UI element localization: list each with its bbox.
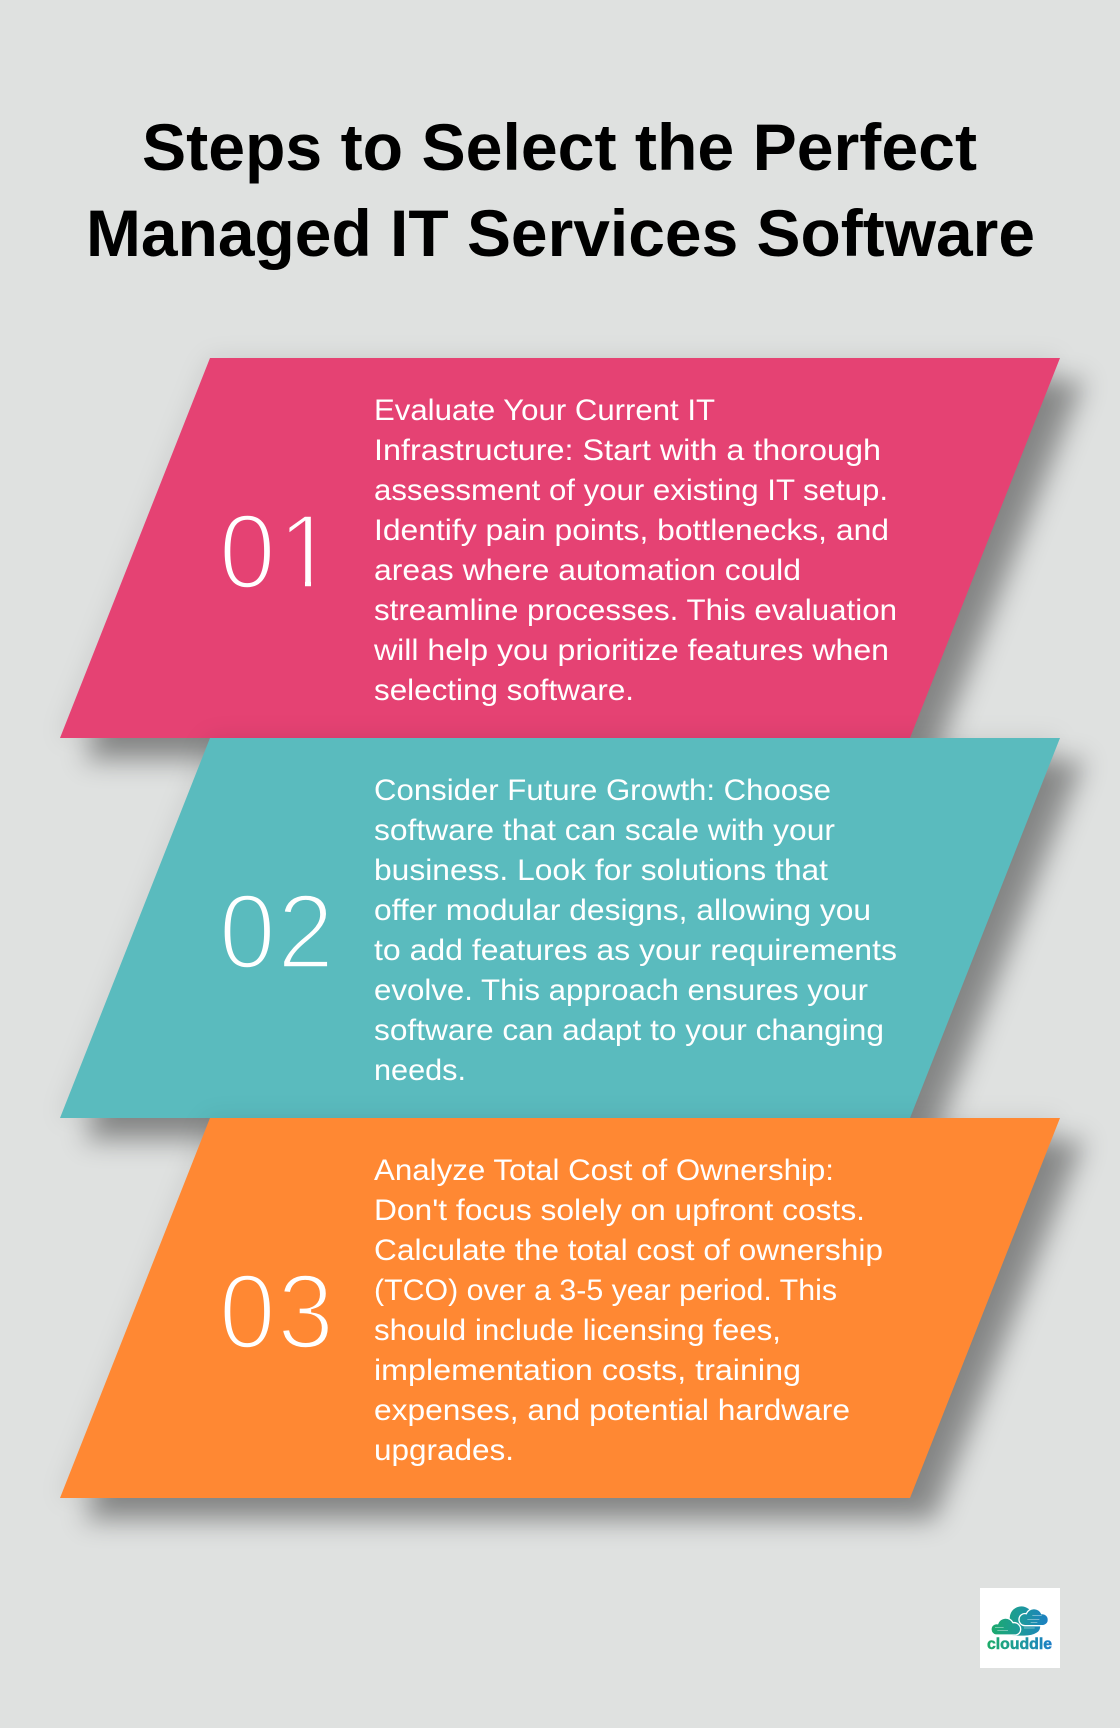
text: total cost of ownership: should include licensing fees, [374, 1314, 781, 1347]
text: future growth: software can adapt to your changing [374, 1014, 884, 1047]
orange parallelogram [60, 1118, 1060, 1498]
text: future growth [374, 774, 897, 1087]
teal parallelogram [60, 738, 1060, 1118]
text: total cost of ownership: expenses, and potential hardware [374, 1394, 850, 1427]
text: total cost of ownership: (TCO) over a 3-5 year period. This [374, 1274, 837, 1307]
logo wordmark: clouddle [987, 1636, 1052, 1653]
text: total cost of ownership [374, 1154, 883, 1467]
title: Steps to Select the Perfect [142, 110, 977, 184]
panel: step 02 [60, 738, 1060, 1118]
text: future growth: offer modular designs, allowing you [374, 894, 871, 927]
panel: step 03 [60, 1118, 1060, 1498]
number 01: 01 [219, 492, 334, 610]
text: total cost of ownership: Calculate the total cost of ownership [374, 1234, 883, 1267]
text: total cost of ownership: Analyze Total Cost of Ownership: [374, 1154, 834, 1187]
text: evaluate infrastructure: streamline processes. This evaluation [374, 594, 897, 627]
text: total cost of ownership: implementation costs, training [374, 1354, 801, 1387]
panel: step 01 [60, 358, 1060, 738]
text: future growth: evolve. This approach ensures your [374, 974, 868, 1007]
text: evaluate infrastructure: Identify pain points, bottlenecks, and [374, 514, 889, 547]
text: evaluate infrastructure [373, 394, 897, 707]
text: evaluate infrastructure: Infrastructure: Start with a thorough [374, 434, 881, 467]
text: future growth: needs. [374, 1054, 466, 1087]
text: evaluate infrastructure: will help you prioritize features when [373, 634, 889, 667]
icon: clouds [991, 1606, 1048, 1636]
text: future growth: Consider Future Growth: Choose [374, 774, 831, 807]
number 03: 03 [219, 1252, 334, 1370]
logo: clouddle [980, 1588, 1060, 1668]
title: Managed IT Services Software [86, 196, 1035, 270]
text: total cost of ownership: upgrades. [374, 1434, 514, 1467]
text: evaluate infrastructure: selecting software. [374, 674, 634, 707]
title [86, 110, 1035, 270]
text: future growth: software that can scale with your [374, 814, 835, 847]
text: total cost of ownership: Don't focus solely on upfront costs. [374, 1194, 865, 1227]
text: future growth: business. Look for solutions that [374, 854, 829, 887]
text: future growth: to add features as your requirements [374, 934, 897, 967]
pink parallelogram [60, 358, 1060, 738]
text: evaluate infrastructure: assessment of your existing IT setup. [374, 474, 888, 507]
text: evaluate infrastructure: areas where automation could [374, 554, 801, 587]
number 02: 02 [219, 872, 334, 990]
text: evaluate infrastructure: Evaluate Your Current IT [374, 394, 715, 427]
